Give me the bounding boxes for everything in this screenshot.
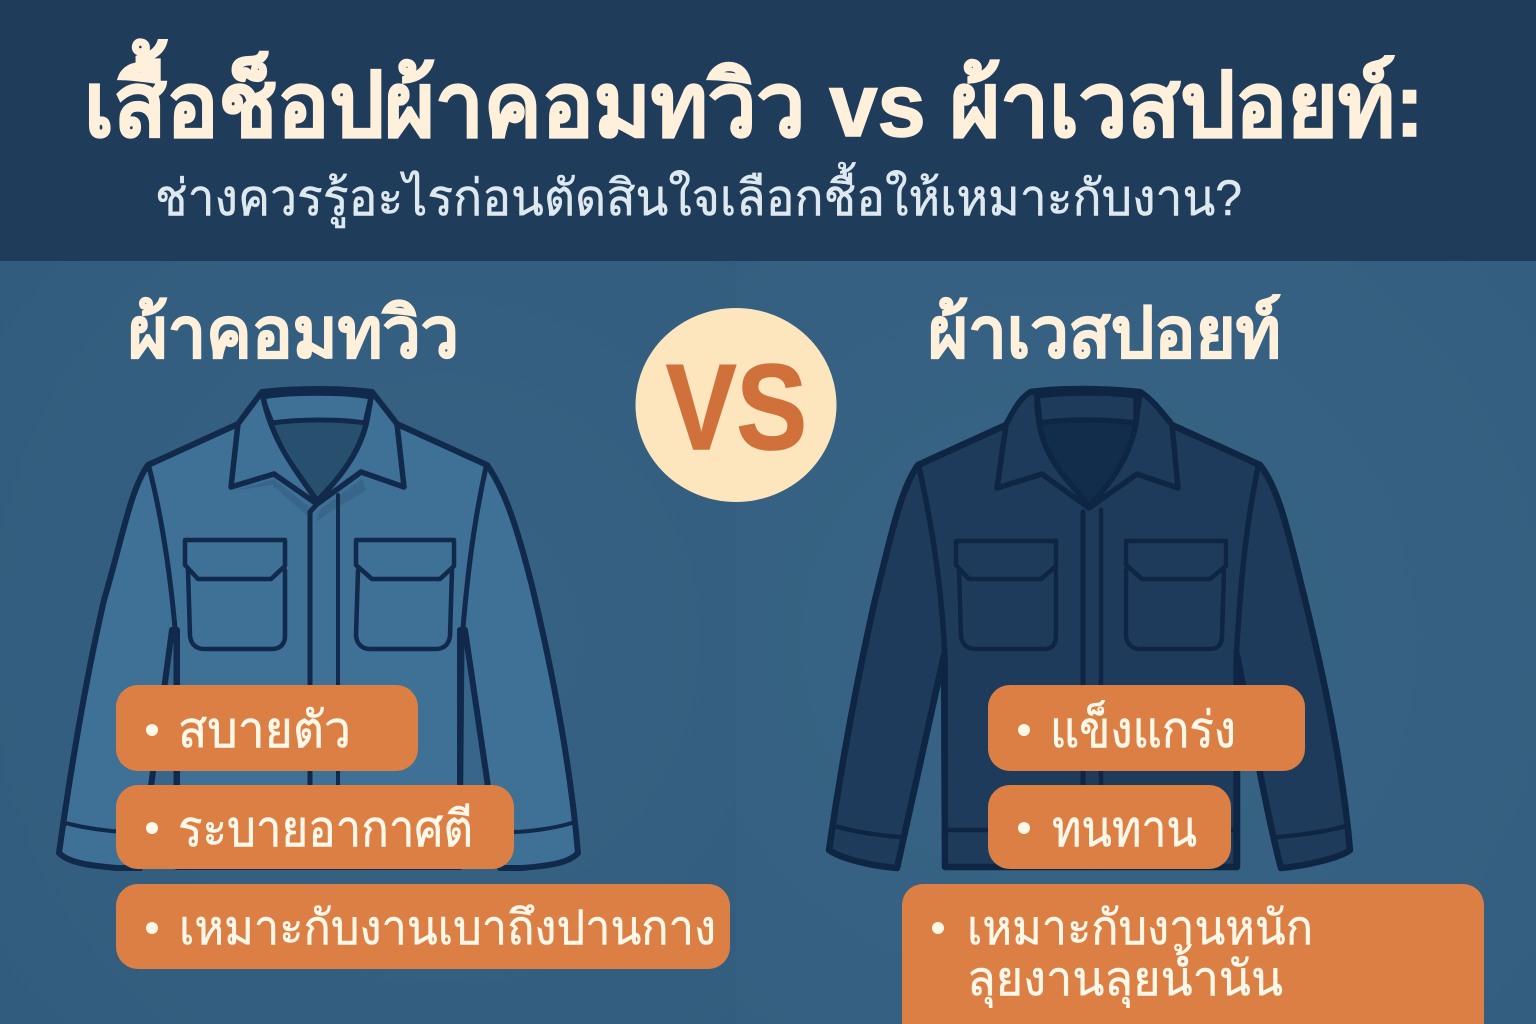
icon: VS badge [636, 308, 836, 502]
callout: breathable: ระบายอากาศตี [178, 801, 473, 857]
callout: comfortable: สบายตัว [178, 702, 351, 758]
callout: heavy work [902, 884, 1484, 1024]
callout: comfortable [116, 685, 418, 771]
icon: waspoint work jacket [829, 389, 1350, 868]
panel: header band [0, 0, 1536, 261]
heading: right fabric: ผ้าเวสปอยท์ [928, 294, 1281, 372]
callout: durable [988, 785, 1231, 869]
icon: cotton twill work jacket [59, 389, 578, 868]
callout: heavy work: ลุยงานลุยน้ำนัน [967, 944, 1283, 1008]
callout: heavy work: เหมาะกับงานหนัก [967, 902, 1313, 955]
title: เสื้อช็อปผ้าคอมทวิว vs ผ้าเวสปอยท์: [84, 39, 1424, 156]
panel: right background [736, 260, 1536, 1024]
callout: durable: ทนทาน [1052, 801, 1197, 857]
panel: left background [0, 260, 736, 1024]
callout: breathable [116, 785, 514, 869]
heading: left fabric: ผ้าคอมทวิว [128, 294, 459, 372]
callout: strong: แข็งแกร่ง [1050, 700, 1236, 758]
callout: light to medium work [116, 884, 730, 969]
icon: VS badge: VS [666, 339, 807, 475]
callout: light to medium work: เหมาะกับงานเบาถึงปานกาง [179, 902, 716, 955]
subtitle: ช่างควรรู้อะไรก่อนตัดสินใจเลือกชื้อให้เหมาะกับงาน? [155, 162, 1242, 228]
callout: strong [988, 685, 1305, 771]
